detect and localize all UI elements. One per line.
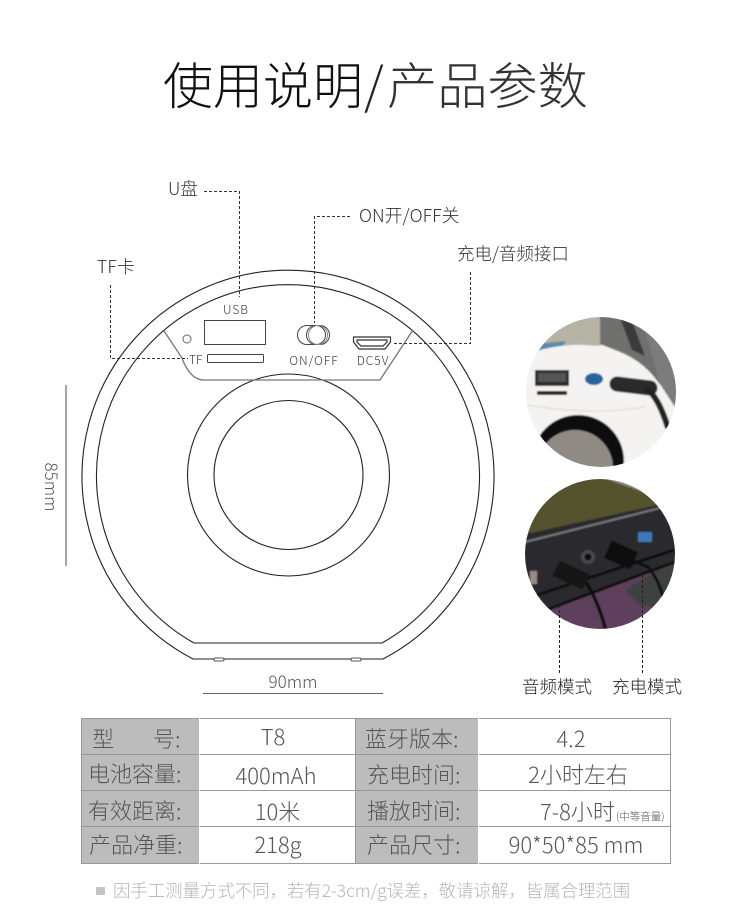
row 2: 电池容量: bbox=[88, 757, 182, 789]
indicator light bbox=[183, 335, 191, 343]
title: / bbox=[364, 47, 384, 119]
speaker ring inner bbox=[214, 400, 363, 550]
row 3: (中等音量) bbox=[616, 809, 665, 824]
USB label: USB bbox=[223, 301, 249, 318]
row 1: 型 bbox=[92, 722, 114, 754]
row 4: 90*50*85 mm bbox=[509, 828, 643, 860]
rubber foot right bbox=[351, 658, 361, 661]
row 3: 7-8小时 bbox=[540, 795, 615, 827]
row 4 bbox=[89, 828, 643, 860]
dimension: height 85mm: 85mm bbox=[40, 463, 65, 511]
micro USB port bbox=[354, 337, 390, 349]
label: 充电模式: 充电模式 bbox=[612, 674, 682, 699]
callout: 充电/音频接口 bbox=[394, 241, 569, 344]
callout: 充电/音频接口: 充电/音频接口 bbox=[457, 241, 569, 266]
callout: TF卡 bbox=[97, 253, 188, 358]
photo: speaker ports close-up bbox=[526, 317, 676, 467]
dimension: width 90mm: 90mm bbox=[269, 668, 317, 693]
callout: U盘: U盘 bbox=[168, 176, 198, 201]
row 3 bbox=[88, 794, 665, 827]
power switch bbox=[298, 326, 330, 344]
row 1: 蓝牙版本: bbox=[365, 722, 459, 754]
callout: ON开/OFF关 bbox=[314, 202, 460, 323]
title bbox=[163, 47, 588, 119]
row 4: 218g bbox=[254, 828, 302, 860]
row 3: 有效距离: bbox=[88, 794, 182, 826]
row 1: 号: bbox=[153, 722, 181, 754]
title: 产品参数 bbox=[387, 47, 588, 119]
row 4: 产品净重: bbox=[89, 828, 183, 860]
TF slot bbox=[208, 354, 264, 362]
DC5V label: DC5V bbox=[357, 352, 389, 369]
row 2: 2小时左右 bbox=[528, 758, 628, 790]
label cell backgrounds bbox=[81, 718, 479, 864]
footnote: 因手工测量方式不同，若有2-3cm/g误差，敬请谅解，皆属合理范围 bbox=[113, 878, 630, 903]
USB port bbox=[204, 320, 266, 344]
row 2: 充电时间: bbox=[367, 758, 461, 790]
title: 使用说明 bbox=[163, 47, 363, 119]
spec table bbox=[81, 718, 671, 864]
speaker inner body bbox=[96, 285, 480, 643]
row 2 bbox=[88, 757, 628, 791]
row 4: 产品尺寸: bbox=[367, 828, 461, 860]
callout: TF卡: TF卡 bbox=[97, 253, 135, 279]
table grid bbox=[81, 718, 671, 864]
row 3: 播放时间: bbox=[367, 794, 461, 826]
row 1: 4.2 bbox=[556, 722, 586, 754]
speaker outer body bbox=[82, 270, 494, 659]
photo: audio and charging modes bbox=[525, 479, 675, 629]
callout: U盘 bbox=[168, 176, 240, 297]
rubber foot left bbox=[214, 658, 224, 661]
ON/OFF label: ON/OFF bbox=[289, 352, 339, 369]
TF label: TF bbox=[189, 351, 203, 368]
row 3: 10米 bbox=[255, 795, 300, 827]
label: 音频模式: 音频模式 bbox=[522, 674, 592, 699]
row 2: 400mAh bbox=[235, 759, 317, 791]
port panel outline bbox=[164, 330, 413, 380]
row 1: T8 bbox=[261, 720, 285, 752]
row 1 bbox=[92, 720, 586, 754]
speaker line drawing bbox=[82, 270, 494, 661]
port panel bbox=[183, 301, 390, 369]
callout: ON开/OFF关: ON开/OFF关 bbox=[359, 202, 460, 228]
speaker ring outer bbox=[188, 374, 390, 576]
mode leader lines bbox=[560, 570, 642, 675]
